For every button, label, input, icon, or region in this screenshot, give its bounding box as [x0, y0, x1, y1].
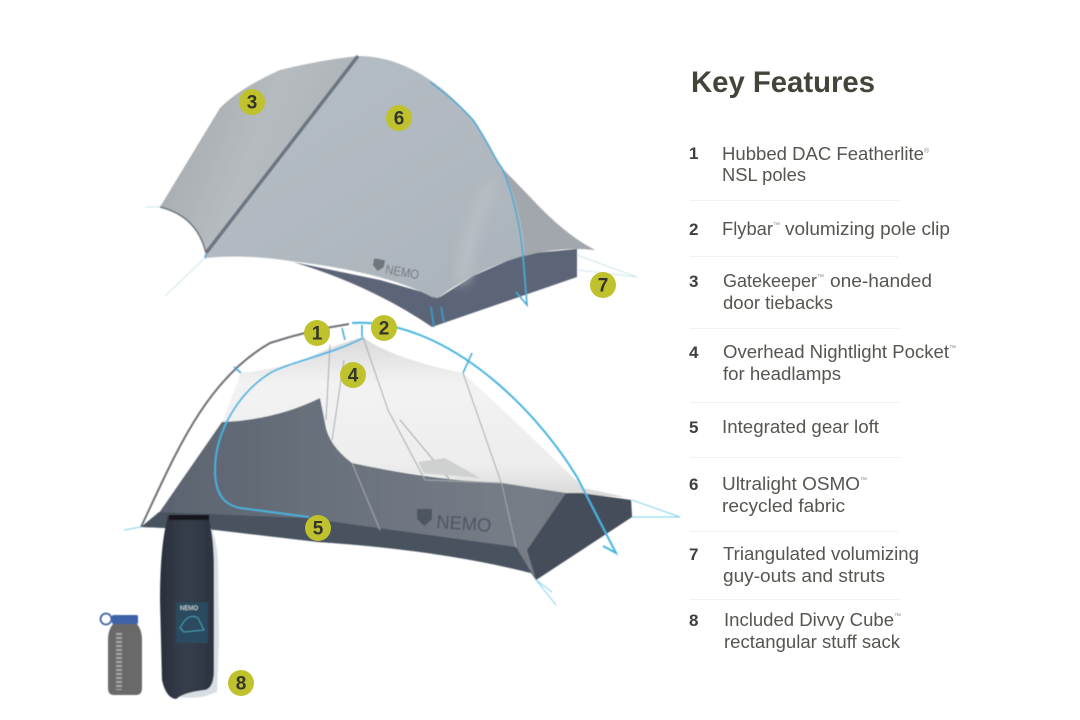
feature 4: ™ — [949, 345, 956, 352]
sack label tent outline — [180, 616, 204, 632]
sack label text: NEMO — [180, 606, 198, 612]
feature 8: 8 — [689, 611, 698, 630]
door zip curve — [215, 338, 363, 517]
sack strap — [169, 515, 209, 520]
fly logo: NEMO — [384, 262, 420, 282]
badge 6: 6 — [394, 108, 404, 130]
fly left panel — [160, 56, 358, 253]
feature 2: Flybar — [722, 218, 773, 239]
title: Key Features — [691, 66, 875, 99]
sack label — [176, 602, 208, 643]
fly right shade — [502, 168, 595, 256]
feature 3: 3 — [689, 272, 698, 291]
feature 6: 6 — [689, 475, 698, 494]
feature 1: NSL poles — [722, 164, 806, 185]
badge 3: 3 — [247, 92, 257, 114]
fly blue pole — [430, 82, 527, 305]
badge 1 — [304, 320, 330, 346]
fly inner floor — [293, 249, 577, 327]
stuff sack — [160, 515, 219, 699]
feature 8: ™ — [894, 613, 901, 620]
bottle scale — [116, 633, 122, 690]
badge 8 — [228, 670, 254, 696]
fly guy lines — [145, 207, 637, 296]
feature 1 — [689, 143, 930, 185]
mesh canopy — [222, 337, 625, 497]
feature 6 — [689, 473, 867, 516]
pole clips — [234, 325, 472, 373]
badge 5 — [305, 515, 331, 541]
sack body — [160, 516, 214, 699]
feature 2 — [689, 218, 950, 239]
feature 7: Triangulated volumizing — [723, 543, 919, 564]
fly main panel — [205, 56, 595, 298]
feature 4 — [689, 341, 956, 384]
feature 6: Ultralight OSMO — [722, 473, 860, 494]
fly ridge seam — [206, 56, 358, 253]
dark tent body — [141, 398, 632, 580]
badge 5: 5 — [313, 518, 324, 540]
fly light streak — [456, 180, 496, 285]
sack pale edge — [170, 520, 219, 698]
badge 2 — [371, 315, 397, 341]
tent with rainfly — [145, 56, 637, 327]
grey pole section — [141, 324, 349, 527]
feature 3: ™ — [817, 274, 824, 281]
feature 4: for headlamps — [723, 363, 841, 384]
feature 8: Included Divvy Cube — [724, 609, 894, 630]
badge 7: 7 — [598, 276, 608, 296]
fly logo — [371, 258, 420, 282]
water bottle — [100, 614, 142, 695]
callout badges — [228, 89, 616, 696]
feature 4: Overhead Nightlight Pocket — [723, 341, 949, 362]
feature 1: 1 — [689, 144, 698, 163]
blue pole section — [352, 323, 616, 553]
feature 7: guy-outs and struts — [723, 565, 885, 586]
badge 8: 8 — [236, 674, 246, 694]
tent without rainfly — [124, 323, 680, 605]
feature 1: ® — [924, 147, 930, 155]
feature 7 — [689, 543, 919, 586]
tent logo: NEMO — [436, 512, 492, 537]
feature 1: Hubbed DAC Featherlite — [722, 143, 924, 164]
feature 6: ™ — [860, 477, 867, 484]
feature 3: one-handed — [830, 270, 932, 291]
badge 4: 4 — [348, 366, 359, 386]
badge 6 — [386, 105, 412, 131]
badge 4 — [340, 362, 366, 388]
feature 7: 7 — [689, 545, 698, 564]
fly hem — [160, 207, 206, 253]
badge 3 — [239, 89, 265, 115]
feature 3 — [689, 270, 932, 313]
badge 1: 1 — [312, 324, 323, 344]
bottle loop — [100, 614, 112, 624]
feature 6: recycled fabric — [722, 495, 845, 516]
inner mesh lines — [326, 337, 516, 547]
feature 8: rectangular stuff sack — [724, 631, 901, 652]
feature 2: 2 — [689, 220, 698, 239]
bottle body — [108, 624, 142, 695]
feature 3: door tiebacks — [723, 292, 833, 313]
vestibule end — [527, 493, 632, 580]
feature 5: Integrated gear loft — [722, 416, 879, 437]
feature 2: volumizing pole clip — [785, 218, 950, 239]
fly corner strut — [205, 254, 444, 327]
bottle cap — [112, 615, 138, 624]
guy lines — [124, 500, 680, 605]
feature 5: 5 — [689, 418, 698, 437]
badge 7 — [590, 272, 616, 298]
feature 3: Gatekeeper — [723, 270, 817, 291]
lower bathtub band — [141, 512, 536, 580]
feature list — [689, 143, 956, 652]
tent logo — [417, 509, 492, 537]
feature 2: ™ — [773, 222, 780, 229]
gear loft — [418, 458, 480, 478]
feature 8 — [689, 609, 901, 652]
badge 2: 2 — [379, 318, 389, 340]
feature 4: 4 — [689, 343, 699, 362]
